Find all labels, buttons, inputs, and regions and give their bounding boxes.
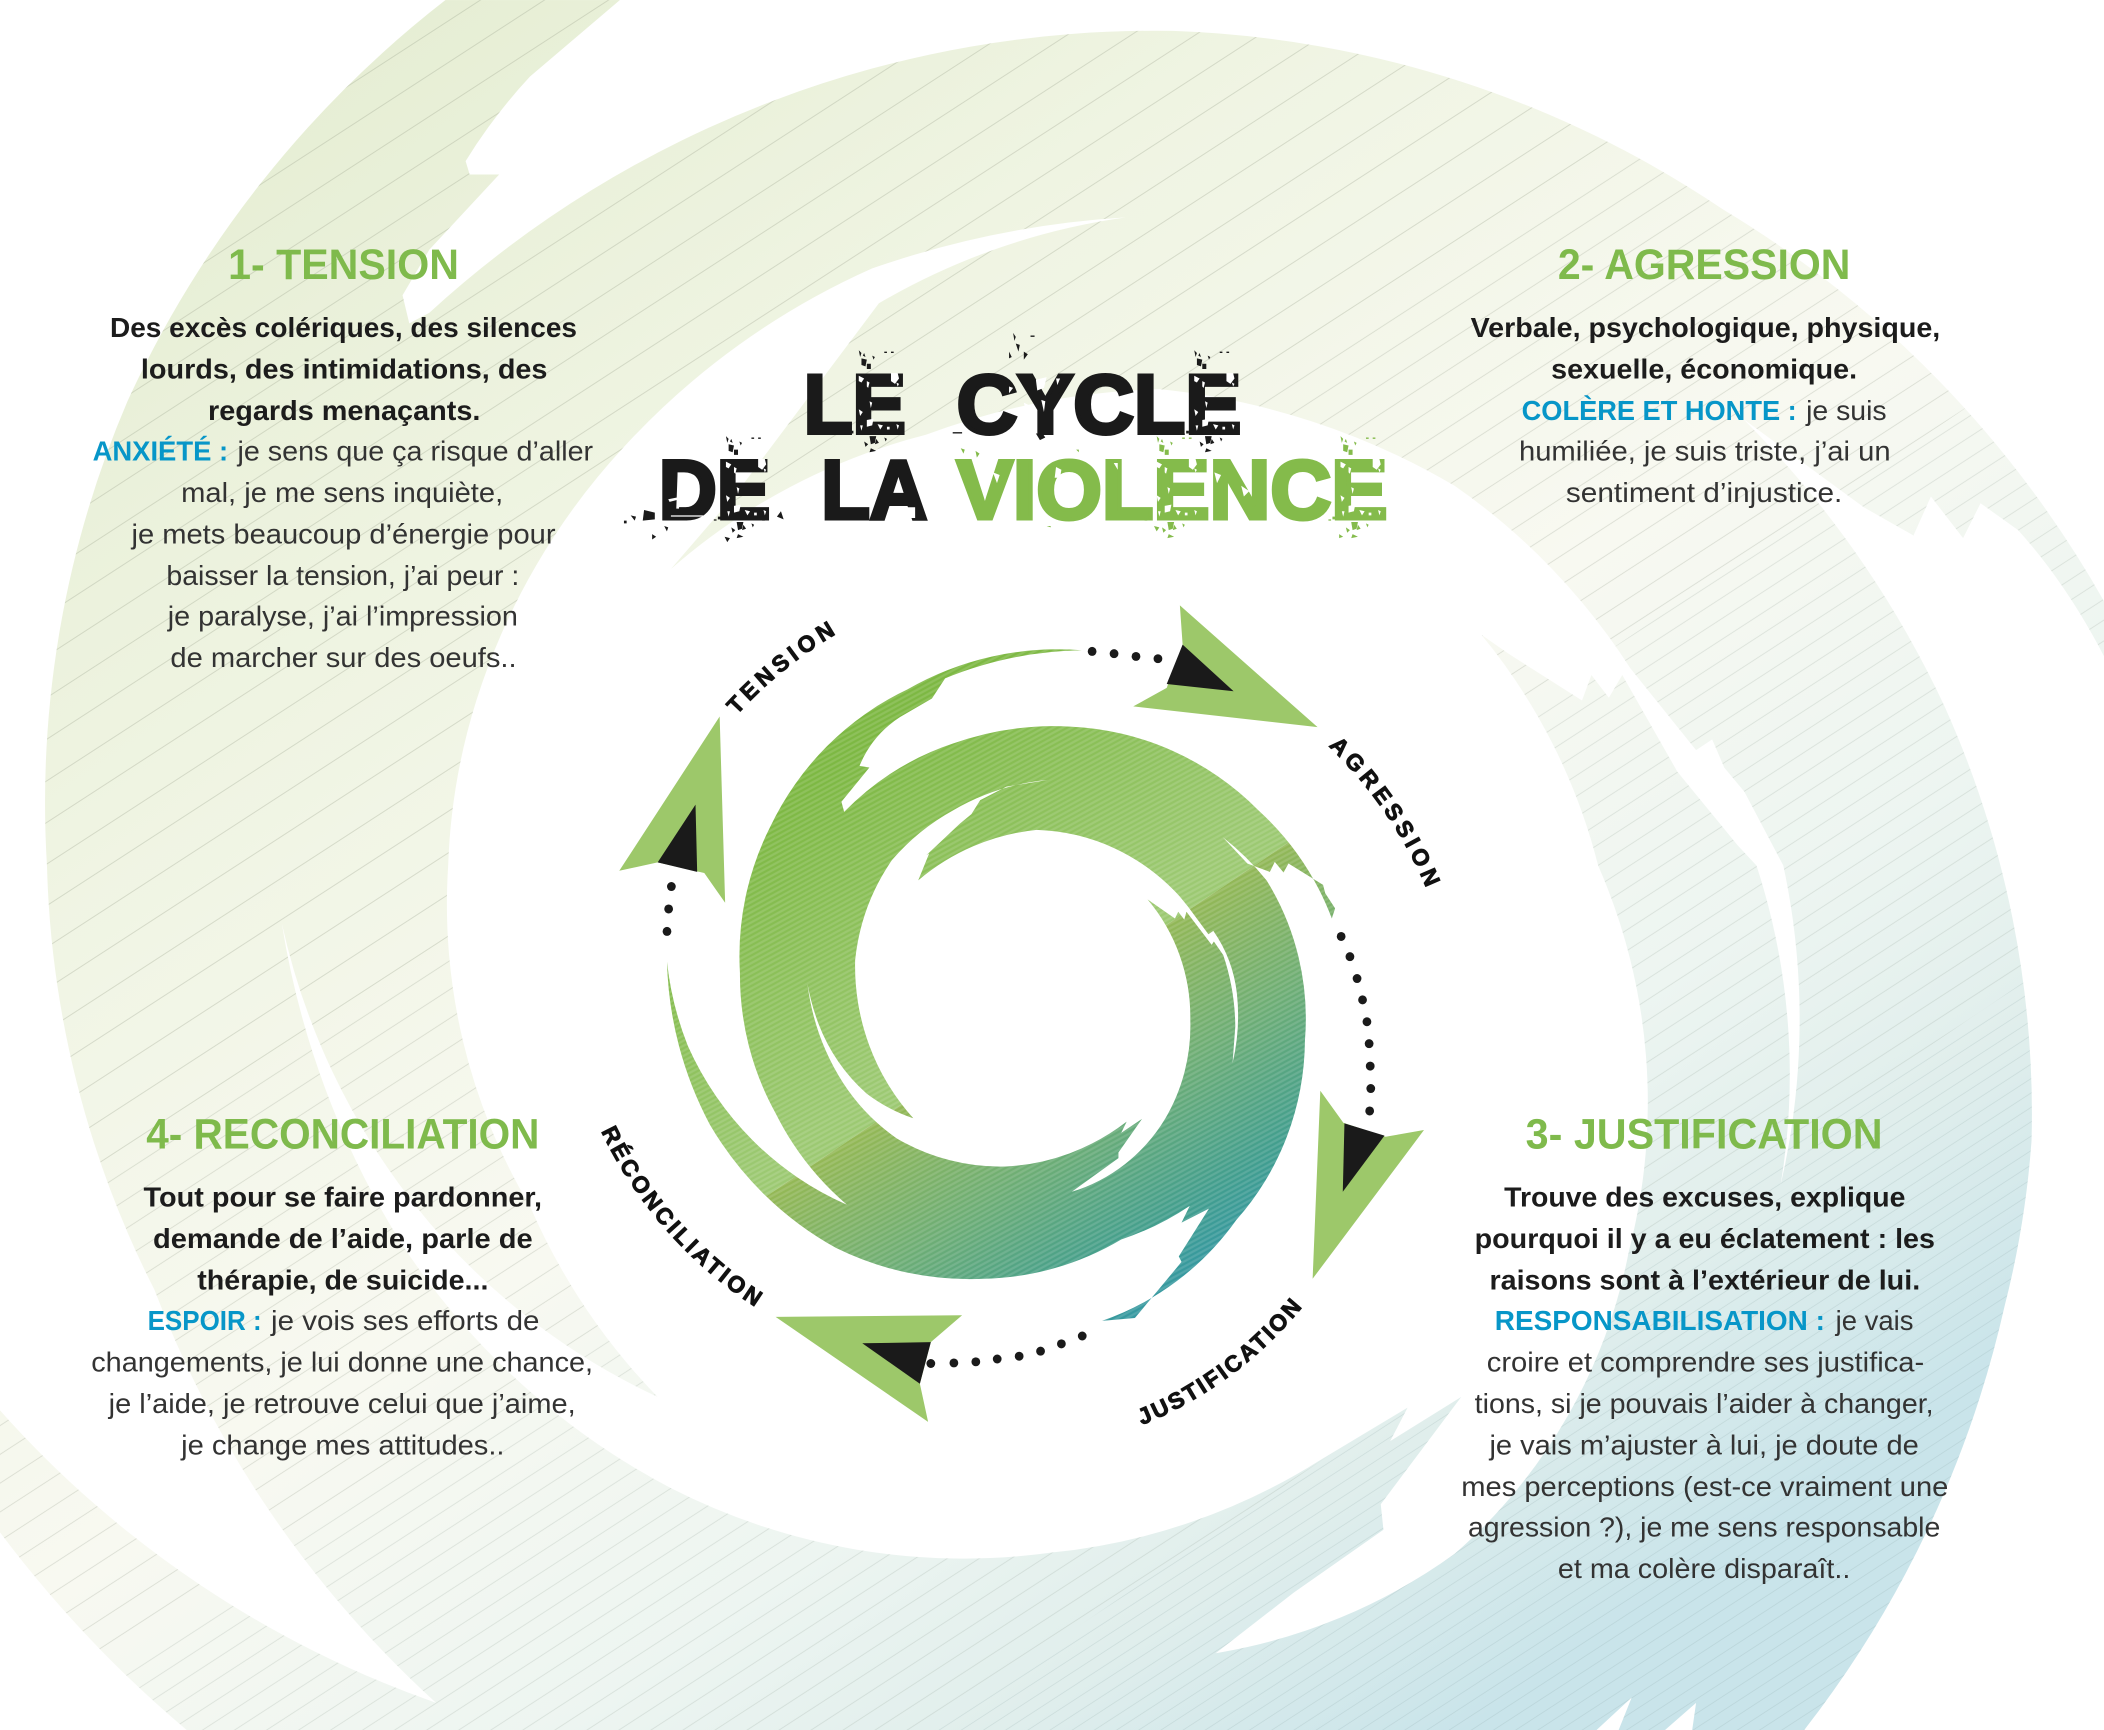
arrow: to justification: [1313, 1091, 1424, 1279]
label: reconciliation: RÉCONCILIATION: [601, 1124, 764, 1307]
text block: justification description: pourquoi il y a eu éclatement : les: [1475, 1222, 1935, 1254]
text block: tension description: mal, je me sens inquiète,: [181, 476, 503, 508]
text block: reconciliation description: Tout pour se faire pardonner,: [144, 1180, 542, 1212]
heading: 2- agression: 2- AGRESSION: [1558, 241, 1850, 288]
text block: reconciliation description: [91, 1180, 593, 1461]
text block: agression description: je suis: [1805, 394, 1887, 426]
text block: justification description: [1461, 1180, 1948, 1584]
text block: tension description: baisser la tension, j’ai peur :: [166, 559, 519, 591]
text block: tension description: Des excès colériques, des silences: [110, 311, 577, 343]
heading: 3- justification: 3- JUSTIFICATION: [1526, 1111, 1883, 1158]
text block: tension description: je mets beaucoup d’énergie pour: [130, 517, 556, 549]
title word: LE: LE: [804, 358, 906, 451]
text block: justification description: Trouve des excuses, explique: [1504, 1180, 1905, 1212]
panel: 4 reconciliation: [91, 1111, 593, 1461]
text block: tension description: de marcher sur des oeufs..: [170, 641, 517, 673]
arrow: to tension: [619, 716, 725, 903]
arrow: to agression: [1133, 605, 1318, 727]
title word: DE: DE: [659, 444, 770, 537]
dotted connectors: [663, 647, 1375, 1368]
text block: tension description: je sens que ça risque d’aller: [236, 434, 593, 466]
text block: agression description: COLÈRE ET HONTE :: [1522, 394, 1797, 426]
text block: tension description: ANXIÉTÉ :: [93, 434, 228, 466]
text block: agression description: sentiment d’injustice.: [1566, 476, 1842, 508]
text block: justification description: je vais: [1835, 1304, 1913, 1336]
label: tension: TENSION: [724, 620, 836, 712]
title word: VIOLENCE: VIOLENCE: [957, 444, 1387, 537]
label: agression: AGRESSION: [1328, 738, 1441, 888]
text block: reconciliation description: je change mes attitudes..: [180, 1429, 505, 1461]
text block: justification description: RESPONSABILISATION :: [1495, 1304, 1825, 1336]
text block: justification description: croire et comprendre ses justifica-: [1487, 1345, 1924, 1377]
panel: 3 justification: [1461, 1111, 1948, 1584]
text block: reconciliation description: je vois ses efforts de: [270, 1304, 539, 1336]
title word: CYCLE: CYCLE: [957, 358, 1241, 451]
text block: justification description: je vais m’ajuster à lui, je doute de: [1488, 1429, 1919, 1461]
text block: reconciliation description: changements, je lui donne une chance,: [91, 1345, 593, 1377]
text block: tension description: regards menaçants.: [208, 394, 480, 426]
panel: 1 tension: [93, 241, 593, 673]
text block: tension description: je paralyse, j’ai l’impression: [167, 599, 518, 631]
text block: reconciliation description: demande de l’aide, parle de: [153, 1222, 533, 1254]
text block: justification description: et ma colère disparaît..: [1558, 1552, 1850, 1584]
text block: justification description: raisons sont à l’extérieur de lui.: [1489, 1264, 1920, 1296]
text block: reconciliation description: thérapie, de suicide...: [197, 1264, 488, 1296]
curved stage labels: [601, 620, 1441, 1424]
central swirl: [667, 649, 1335, 1321]
text block: agression description: [1471, 311, 1940, 508]
title word: LA: LA: [821, 444, 927, 537]
heading: 4- reconciliation: 4- RECONCILIATION: [146, 1111, 539, 1158]
text block: agression description: Verbale, psychologique, physique,: [1471, 311, 1940, 343]
arrow: to reconciliation: [776, 1315, 962, 1422]
text block: tension description: [93, 311, 593, 673]
text block: reconciliation description: je l’aide, je retrouve celui que j’aime,: [108, 1387, 576, 1419]
central cycle diagram: [619, 606, 1424, 1422]
text block: justification description: mes perceptions (est-ce vraiment une: [1461, 1470, 1948, 1502]
text block: agression description: humiliée, je suis triste, j’ai un: [1519, 434, 1891, 466]
text block: justification description: agression ?), je me sens responsable: [1468, 1510, 1940, 1542]
label: justification: JUSTIFICATION: [1140, 1297, 1302, 1424]
heading: 1- tension: 1- TENSION: [228, 241, 459, 288]
grunge splatter: [624, 333, 1381, 542]
text block: justification description: tions, si je pouvais l’aider à changer,: [1475, 1387, 1934, 1419]
text block: tension description: lourds, des intimidations, des: [141, 352, 547, 384]
panel: 2 agression: [1471, 241, 1940, 508]
text block: reconciliation description: ESPOIR :: [148, 1304, 262, 1336]
text block: agression description: sexuelle, économique.: [1551, 352, 1857, 384]
title: [624, 333, 1387, 542]
